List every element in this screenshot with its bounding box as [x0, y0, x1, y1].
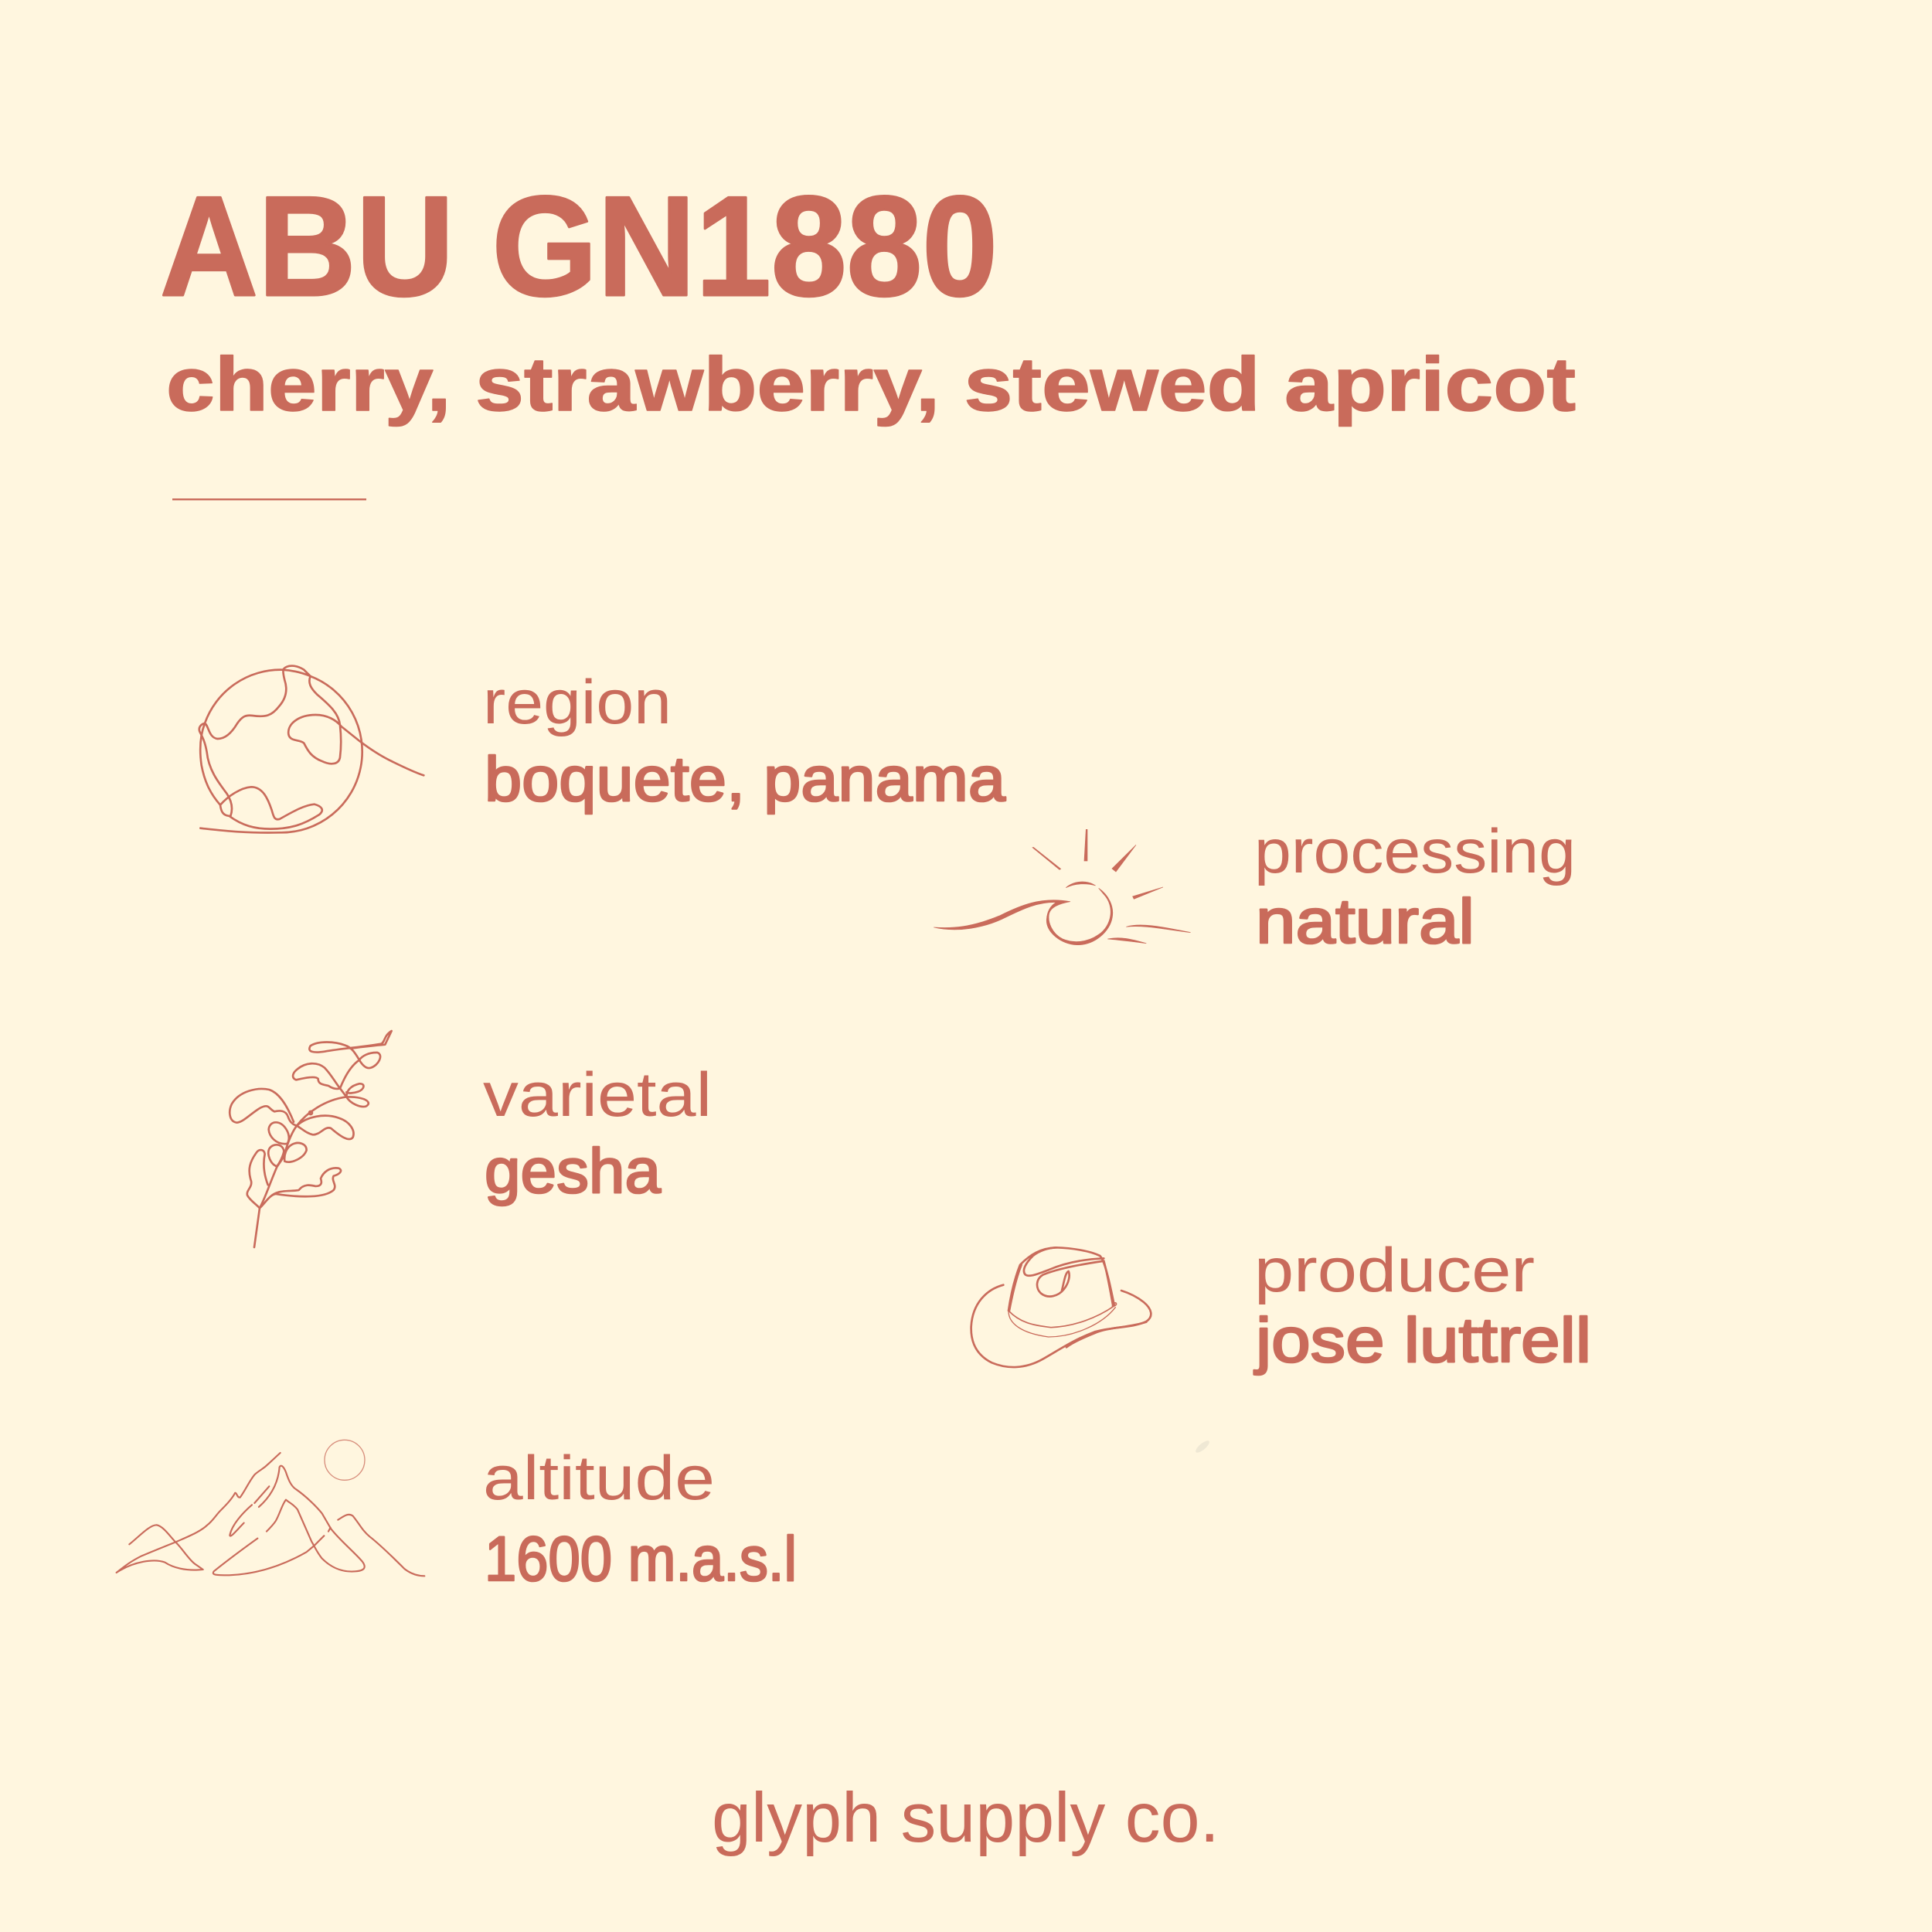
- text: altitude: altitude: [483, 1444, 715, 1513]
- text: processing: processing: [1254, 817, 1576, 886]
- text: altitude: [483, 1444, 797, 1594]
- text: altitude: 1600 m.a.s.l: [485, 1524, 797, 1594]
- text: region: boquete, panama: [485, 744, 1005, 815]
- subtitle: flavor notes: cherry, strawberry, stewed apricot: [166, 342, 1576, 427]
- text: producer: [1254, 1236, 1591, 1376]
- icon: mountains and moon: [117, 1440, 424, 1576]
- icon: sun over wave: [934, 829, 1191, 945]
- footer: brand name: glyph supply co.: [712, 1779, 1219, 1857]
- text: varietal: varietal: [483, 1060, 712, 1130]
- icon: globe: [199, 666, 423, 832]
- text: varietal: gesha: [485, 1136, 661, 1206]
- text: varietal: [483, 1060, 712, 1206]
- text: region: region: [483, 668, 672, 737]
- icon: coffee branch: [230, 1031, 392, 1247]
- icon: hat: [971, 1247, 1151, 1367]
- text: producer: producer: [1254, 1236, 1535, 1305]
- text: processing: natural: [1256, 886, 1475, 957]
- title: ABU GN1880: [160, 166, 998, 325]
- text: producer: jose luttrell: [1254, 1305, 1591, 1376]
- text: processing: [1254, 817, 1576, 957]
- text: region: [483, 668, 1005, 815]
